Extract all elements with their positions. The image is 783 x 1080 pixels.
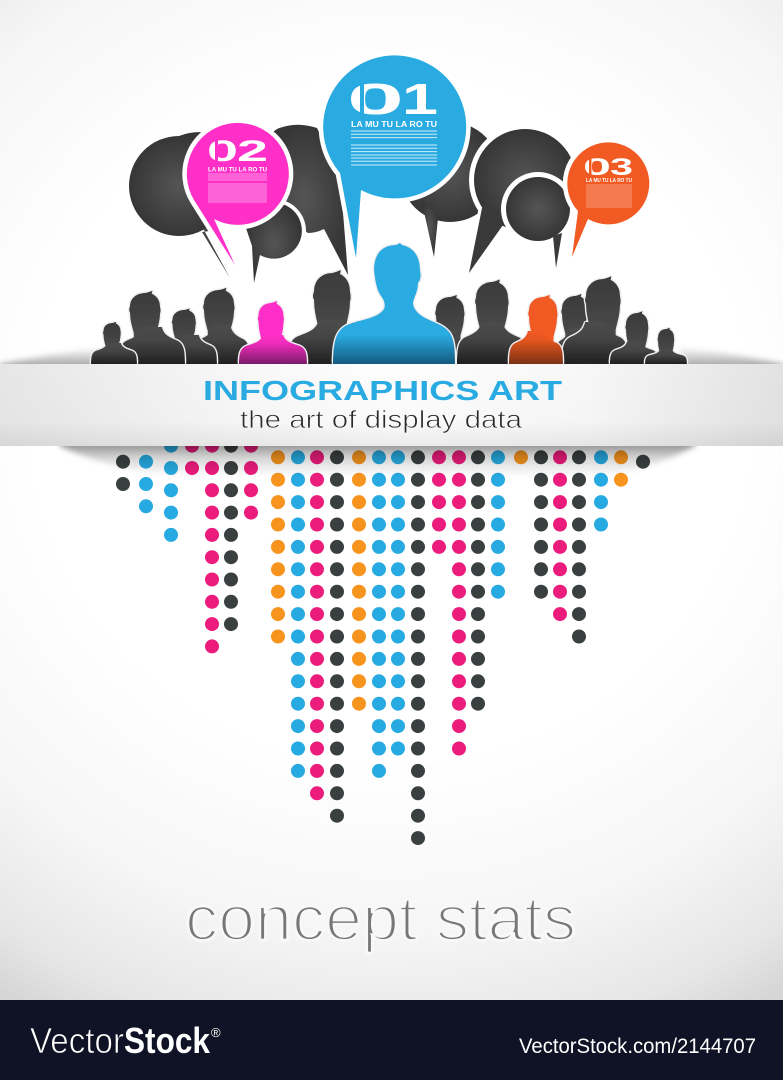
blue bubble 01: LA MU TU LA RO TU [351, 120, 437, 129]
footer bar [0, 1000, 783, 1080]
number 02: 2 [237, 135, 268, 168]
offset dot columns left [123, 446, 251, 646]
footer logo: Vector [30, 1020, 124, 1061]
number 01 [347, 75, 438, 124]
footer url: VectorStock.com/2144707 [519, 1035, 756, 1058]
person: dark tall left of blue [288, 270, 376, 364]
person: pink [239, 301, 307, 364]
person: dark fourth from left [194, 288, 250, 364]
orange bubble 03 [567, 142, 649, 257]
banner shadow [60, 440, 695, 476]
orange bubble 03: LA MU TU LA RO TU [586, 178, 632, 184]
person: dark third from left [165, 308, 217, 364]
single dots [514, 450, 650, 469]
person: dark behind blue [430, 295, 470, 364]
number 01: 0 [347, 75, 404, 124]
banner [0, 364, 783, 446]
number 03: 3 [610, 154, 633, 181]
person: dark far left [91, 322, 137, 364]
dark bubble: inner right [501, 172, 575, 268]
number 01: 1 [402, 75, 438, 124]
number 02: 0 [207, 135, 238, 168]
banner title: INFOGRAPHICS ART [203, 375, 562, 406]
person: dark smallest right [645, 328, 687, 364]
person: orange [509, 295, 563, 364]
main dot columns [278, 457, 621, 838]
dark bubble: far left [129, 132, 248, 278]
dark bubble: large right [469, 124, 581, 273]
person: blue central [333, 243, 455, 364]
footer logo: Stock [124, 1020, 211, 1061]
person: dark second from left [119, 291, 185, 364]
footer logo: ® [211, 1025, 221, 1040]
person: dark tall right [562, 276, 628, 364]
speech bubbles [129, 55, 649, 283]
pink bubble 02: LA MU TU LA RO TU [208, 166, 267, 174]
dark bubble: small under pink [242, 199, 306, 283]
dark bubble: large behind pink [260, 125, 348, 275]
footer logo [30, 1020, 221, 1061]
dark bubble: right of blue [400, 122, 500, 257]
crowd of silhouettes [91, 243, 687, 364]
caption: concept stats: concept stats [185, 884, 576, 954]
blue bubble 01 [323, 55, 466, 258]
number 03 [583, 154, 633, 181]
person: dark right of blue [457, 279, 527, 364]
number 02 [207, 135, 268, 168]
shadow strips beside the crowd [0, 347, 783, 372]
banner subtitle: the art of display data [240, 406, 522, 434]
number 03: 0 [583, 154, 611, 181]
dot chart [123, 446, 650, 838]
person: dark small right [610, 311, 658, 364]
pink bubble 02 [187, 123, 289, 265]
person: dark behind orange [555, 294, 595, 364]
